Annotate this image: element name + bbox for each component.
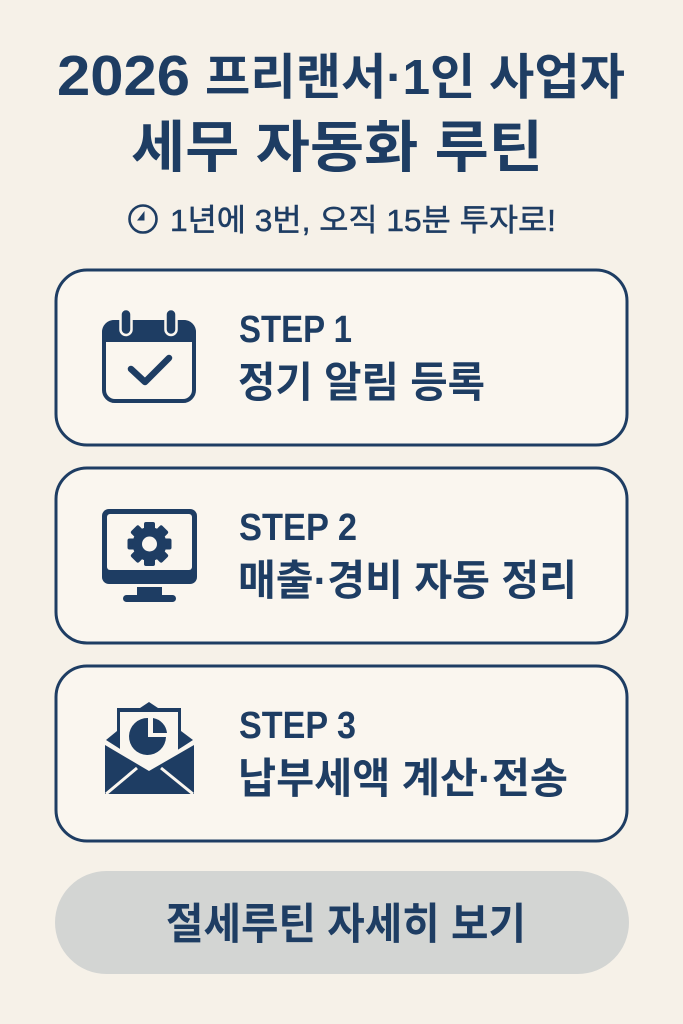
subtitle text: 1년에 3번, 오직 15분 투자로! <box>170 203 556 238</box>
title <box>57 44 625 179</box>
gear <box>128 522 172 566</box>
step label: STEP 1 <box>239 309 352 351</box>
card <box>56 468 627 643</box>
title: 2026 <box>57 44 190 108</box>
card <box>56 666 627 841</box>
step title: 납부세액 계산·전송 <box>238 755 568 802</box>
icon: clock <box>130 206 156 232</box>
panel: step 2 <box>56 468 627 643</box>
step title: 정기 알림 등록 <box>238 359 485 406</box>
button <box>55 871 629 974</box>
button label: 절세루틴 자세히 보기 <box>166 901 526 949</box>
panel: step 3 <box>56 666 627 841</box>
icon: monitor with gear <box>102 509 197 602</box>
icon: envelope with report <box>105 702 194 794</box>
subtitle with clock icon <box>130 203 556 238</box>
title: 프리랜서·1인 사업자 <box>205 51 625 105</box>
step label: STEP 3 <box>239 705 356 747</box>
step title: 매출·경비 자동 정리 <box>238 557 577 604</box>
step label: STEP 2 <box>239 507 357 549</box>
icon: calendar with check <box>102 309 196 401</box>
card <box>56 270 627 445</box>
panel: step 1 <box>56 270 627 445</box>
title: 세무 자동화 루틴 <box>131 116 543 179</box>
